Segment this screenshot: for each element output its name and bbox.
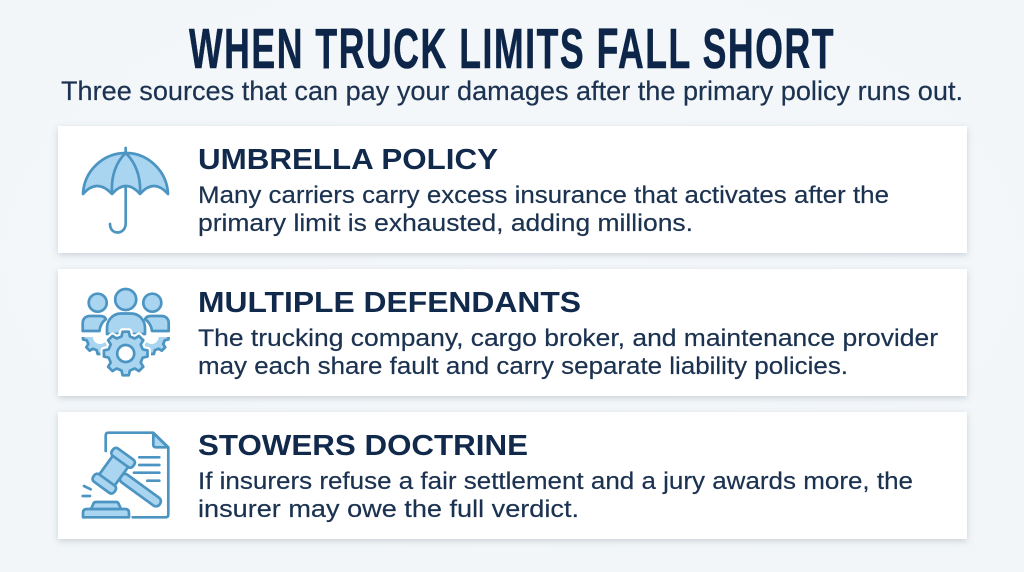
- text: multiple defendants description: may each share fault and carry separate liability policies.: [198, 353, 848, 380]
- text: stowers doctrine description: If insurers refuse a fair settlement and a jury awards more, the: [198, 468, 913, 495]
- subtitle: Three sources that can pay your damages after the primary policy runs out.: [61, 76, 963, 106]
- panel: umbrella policy: [58, 126, 967, 253]
- text: stowers doctrine description: [198, 468, 913, 523]
- text: umbrella policy description: primary limit is exhausted, adding millions.: [198, 210, 693, 237]
- heading: stowers doctrine: STOWERS DOCTRINE: [198, 430, 528, 462]
- heading: multiple defendants: MULTIPLE DEFENDANTS: [198, 287, 581, 319]
- heading: umbrella policy: UMBRELLA POLICY: [198, 144, 498, 176]
- text: umbrella policy description: Many carriers carry excess insurance that activates after the: [198, 182, 889, 209]
- icon: people and gears: [83, 289, 169, 375]
- panel: stowers doctrine: [58, 412, 967, 539]
- icon: gavel and document: [83, 433, 173, 521]
- panel: multiple defendants: [58, 269, 967, 396]
- text: umbrella policy description: [198, 182, 889, 237]
- text: multiple defendants description: [198, 325, 938, 380]
- icon: umbrella: [83, 148, 168, 232]
- text: multiple defendants description: The trucking company, cargo broker, and maintenance provider: [198, 325, 938, 352]
- text: stowers doctrine description: insurer may owe the full verdict.: [198, 496, 579, 523]
